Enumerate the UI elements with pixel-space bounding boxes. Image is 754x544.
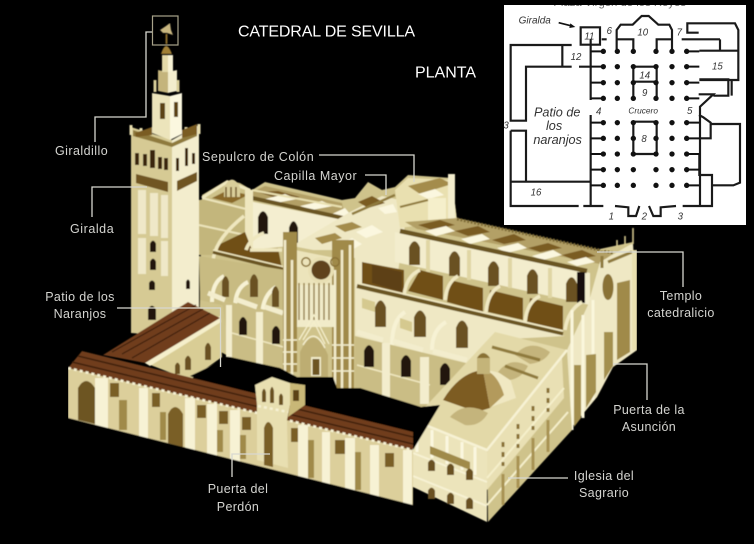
small domes (515, 346, 550, 364)
label: Giraldillo: Giraldillo (55, 144, 108, 158)
plan labels: 3 (503, 121, 509, 132)
plan labels: 6 (607, 26, 613, 37)
portal (300, 338, 328, 380)
label: Patio de los Naranjos: Patio de los (45, 290, 115, 304)
main church body (199, 174, 637, 433)
plan walls (511, 16, 740, 216)
panel: floor plan (500, 0, 751, 225)
right end of church (567, 228, 637, 433)
label: Capilla Mayor (274, 169, 386, 195)
cream clerestory wall right (395, 232, 590, 305)
label: Puerta de la Asunción: Asunción (622, 420, 676, 434)
label: Capilla Mayor: Capilla Mayor (274, 169, 357, 183)
high block right (395, 178, 457, 228)
plan labels: 2 (641, 211, 648, 222)
plan labels: 4 (596, 107, 601, 118)
dome (443, 370, 516, 412)
brown roof row (362, 262, 404, 295)
left upper block (199, 192, 250, 255)
plan labels: 10 (637, 27, 649, 38)
recess shadows (119, 400, 361, 490)
black courtyard (190, 357, 440, 450)
roof row A (252, 186, 345, 217)
lower wall right (355, 336, 470, 407)
Puerta del Perdon gate (255, 377, 305, 468)
lower wall left (222, 300, 287, 372)
lantern stage (152, 93, 170, 140)
plan labels: 7 (677, 27, 683, 38)
label: Templo catedralicio: Templo (660, 289, 702, 303)
roof row B (405, 218, 613, 264)
label: Puerta del Perdón: Puerta del (208, 482, 268, 496)
label: Iglesia del Sagrario (508, 469, 634, 500)
label: Giralda: Giralda (70, 222, 114, 236)
left clerestory lower (199, 256, 285, 320)
label: Puerta del Perdón: Perdón (217, 500, 259, 514)
plan labels: Patio de (534, 106, 580, 120)
plan labels (503, 15, 723, 222)
plan labels: Crucero (628, 105, 658, 115)
front wall square windows (110, 383, 394, 467)
plan labels: 9 (642, 88, 648, 99)
plan labels: 3 (678, 211, 684, 222)
label: Templo catedralicio (597, 252, 715, 320)
left wing roof and arcade (103, 302, 222, 380)
label: Iglesia del Sagrario: Iglesia del (574, 469, 634, 483)
small dome (224, 180, 240, 197)
spire (158, 70, 168, 93)
brown lower-left roofs (218, 232, 282, 268)
subtitle: planta: PLANTA (415, 64, 476, 82)
cream wall A (249, 201, 343, 250)
upper band (133, 130, 197, 192)
plan labels: 16 (531, 187, 542, 198)
plan labels: naranjos (533, 133, 583, 147)
front wall arches (78, 381, 95, 424)
central facade (283, 232, 355, 388)
plan labels: 1 (609, 211, 614, 222)
label: Iglesia del Sagrario: Sagrario (579, 486, 629, 500)
sagrario front details (417, 425, 475, 475)
label: Puerta del Perdón (208, 454, 270, 514)
plan labels: 14 (639, 70, 650, 81)
plan columns (591, 49, 699, 188)
lower clerestory right (355, 288, 565, 366)
cathedral 3D illustration (68, 23, 637, 544)
rose window (308, 257, 334, 283)
plan labels: Giralda (519, 15, 551, 26)
front wall (68, 351, 413, 544)
title: CATEDRAL DE SEVILLA (238, 24, 415, 40)
Giralda tower (131, 23, 199, 336)
capilla block (285, 196, 405, 292)
Iglesia del Sagrario building (413, 332, 572, 522)
label: Sepulcro de Colón (202, 150, 414, 182)
label: Templo catedralicio: catedralicio (647, 306, 715, 320)
label: Patio de los Naranjos (45, 290, 220, 367)
label: Patio de los Naranjos: Naranjos (54, 307, 106, 321)
plan labels: 12 (571, 52, 582, 63)
label: Giralda (70, 187, 147, 236)
lattice panels (138, 190, 168, 276)
merlons (131, 124, 199, 136)
plan labels: 11 (584, 31, 594, 42)
plan labels: 5 (687, 106, 693, 117)
front wall pilasters (95, 378, 412, 506)
label: Puerta de la Asunción (613, 364, 685, 434)
plan labels: 15 (712, 61, 723, 72)
label: Sepulcro de Colón: Sepulcro de Colón (202, 150, 314, 164)
plan labels: los (546, 119, 563, 133)
label: Giraldillo (55, 16, 178, 158)
plan labels: 8 (641, 134, 647, 145)
label: Puerta de la Asunción: Puerta de la (613, 403, 685, 417)
giraldillo (160, 23, 173, 35)
